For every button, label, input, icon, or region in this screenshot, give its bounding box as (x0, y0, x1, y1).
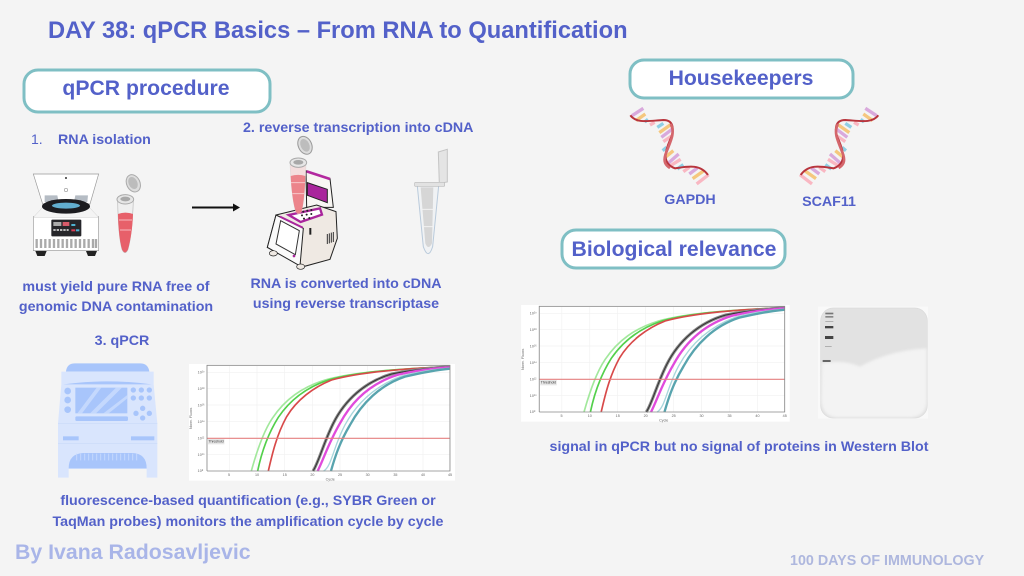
step 3 heading: 3. qPCR (95, 333, 149, 349)
title: DAY 38: qPCR Basics – From RNA to Quantification (48, 18, 628, 44)
icon: qPCR machine (58, 363, 157, 478)
text: step 3 description (53, 493, 444, 530)
text: step 1 description: genomic DNA contamination (19, 299, 213, 315)
arrow (192, 204, 240, 212)
text: step 3 description: TaqMan probes) monitors the amplification cycle by cycle (53, 514, 444, 530)
step 1 heading: RNA isolation (58, 132, 151, 148)
text: step 3 description: fluorescence-based quantification (e.g., SYBR Green or (60, 493, 436, 509)
author credit: By Ivana Radosavljevic (15, 540, 251, 564)
panel: Biological relevance heading: Biological relevance (572, 238, 777, 261)
step 1 heading: 1. (31, 131, 43, 147)
label: SCAF11: SCAF11 (802, 194, 856, 210)
icon: empty tube (415, 149, 447, 254)
panel: qPCR procedure heading: qPCR procedure (62, 77, 230, 100)
chart: qPCR amplification curves (189, 364, 455, 481)
chart: qPCR curves, biological relevance (521, 305, 790, 422)
icon: SCAF11 helix (800, 108, 878, 184)
text: step 1 description: must yield pure RNA free of (22, 279, 210, 295)
text: biological relevance caption: signal in qPCR but no signal of proteins in Western Blot (550, 439, 929, 455)
text: step 1 description (19, 279, 213, 315)
text: step 2 description: using reverse transcriptase (253, 296, 439, 312)
panel: qPCR procedure heading (24, 70, 270, 112)
panel: Housekeepers heading: Housekeepers (669, 67, 813, 90)
step 2 heading: 2. reverse transcription into cDNA (243, 120, 473, 136)
label: GAPDH: GAPDH (664, 192, 716, 208)
panel: Biological relevance heading (562, 230, 785, 268)
icon: red RNA tube (117, 172, 143, 253)
icon: thermal cycler (267, 134, 337, 269)
text: step 2 description (250, 276, 442, 312)
panel: Housekeepers heading (630, 60, 853, 98)
series label: 100 DAYS OF IMMUNOLOGY (790, 553, 985, 569)
icon: GAPDH helix (630, 108, 709, 184)
text: step 2 description: RNA is converted into cDNA (250, 276, 442, 292)
image: Western blot (818, 307, 928, 419)
icon: centrifuge (33, 174, 99, 256)
